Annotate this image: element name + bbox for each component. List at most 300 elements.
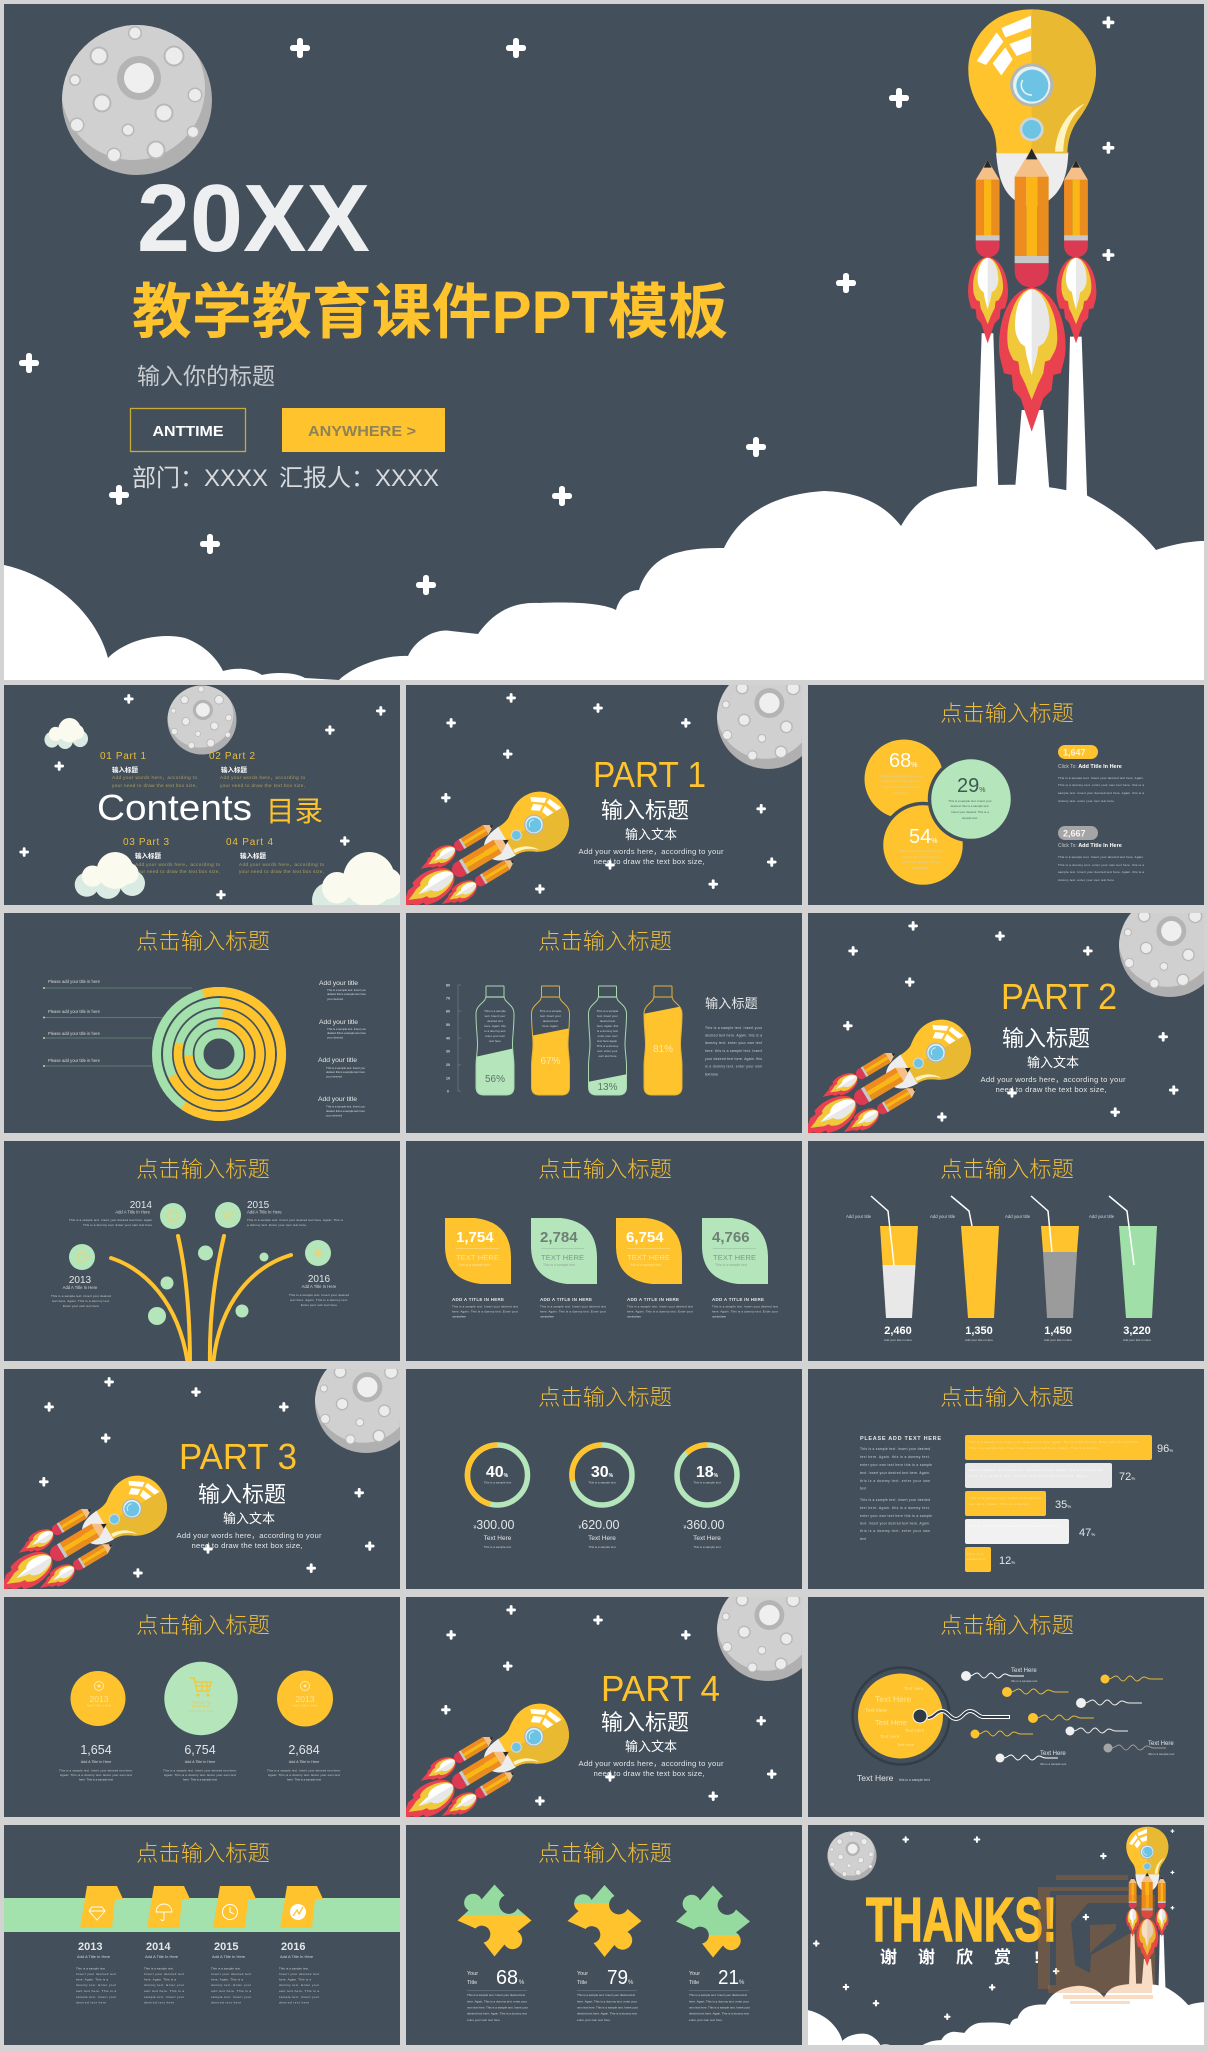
circle: 29%: 29%: [957, 775, 985, 797]
chart axis: 20: [446, 1063, 450, 1067]
bottle: 67%: here. Again.: [542, 1024, 559, 1028]
panel: band timeline slide: [4, 1825, 400, 2045]
right text column: Add your title: [319, 980, 358, 987]
rocket: [783, 1009, 982, 1161]
milestone: 2013: This is a sample text. Insert your desired: [51, 1294, 111, 1298]
circle: 54%: Insert your desired. This is a: [902, 860, 940, 864]
stat block: 1,647: [1058, 745, 1144, 803]
stars: [441, 1605, 777, 1806]
icon: moon: [61, 16, 212, 175]
title: 点击输入标题: [136, 1613, 270, 1638]
left text block: text here. Again. this is a dummy text.: [860, 1455, 930, 1459]
item: part 4: [226, 837, 324, 874]
milestone: 2015: 2015: [247, 1200, 270, 1211]
puzzle: 68%: [458, 1884, 532, 2022]
column: 2014: Insert your desired text: [144, 1972, 184, 1976]
column: 2014: 2014: [146, 1941, 171, 1953]
main yellow disc: [852, 1668, 950, 1764]
card: 4,766: [702, 1218, 768, 1284]
donut: 18%: 18%: [696, 1464, 719, 1481]
bottle: 13%: 13%: [597, 1082, 618, 1093]
bar: 72%: [965, 1463, 1135, 1488]
section subtitle: 输入文本: [625, 827, 677, 842]
part heading: PART 3: [179, 1436, 297, 1477]
description: Add your words here，according to your: [578, 847, 724, 856]
circle: 54%: This is a sample text. Insert your: [899, 849, 943, 853]
subtitle: 输入你的标题: [137, 363, 275, 389]
bottle: 56%: text here: [489, 1039, 501, 1043]
right text column: [318, 980, 366, 1118]
stat block: 1,647: 1,647: [1063, 748, 1086, 758]
circle: 68%: Insert your desired. This is a: [882, 785, 920, 789]
left callouts: Please add your title in here: [48, 1009, 101, 1014]
donut: 18%: ¥360.00: [683, 1518, 725, 1532]
stat circle: 1,654: 2013: [90, 1694, 109, 1704]
bottle: 67%: 67%: [540, 1056, 561, 1067]
caption 3: [627, 1297, 693, 1318]
column: 2016: sample text. Insert your: [279, 1995, 319, 1999]
column: 2016: desired text here: [279, 2000, 309, 2004]
item: part 1: Add your words here，according to: [112, 775, 197, 781]
chart axis: 70: [446, 996, 450, 1000]
caption 2: own text here: [540, 1314, 554, 1318]
puzzle: 79%: desired text here. Again. This is a dummy text: [577, 2012, 637, 2016]
milestone: 2014: Add A Title In Here: [115, 1210, 151, 1214]
column: 2013: here. Again. This is a: [76, 1978, 108, 1982]
circle: 68%: desired. this is a sample text.: [882, 779, 921, 783]
caption 2: This is a sample text. Insert your desired text: [540, 1304, 606, 1308]
puzzle: 79%: here. Again. This is a dummy text. enter your: [577, 2000, 637, 2004]
column: 2016: here. Again. This is a: [279, 1978, 311, 1982]
stat circle: 2,684: This is a sample text. Insert your desired text here.: [267, 1768, 341, 1772]
card: 2,784: This is a sample text: [543, 1263, 575, 1267]
section title: 输入标题: [601, 1710, 689, 1735]
puzzle: 79%: Your: [577, 1971, 588, 1977]
puzzle: 79%: Title: [577, 1980, 587, 1986]
stat circle: 6,754: 6,754: [184, 1743, 216, 1757]
left text block: This is a sample text. Insert your desired: [860, 1447, 930, 1451]
circle: 29%: This is a sample text. Insert your: [948, 799, 992, 803]
stat block: 2,667: dummy text. enter your own text here: [1058, 878, 1114, 882]
stat block: 1,647: Click To: Add Title In Here: [1058, 764, 1122, 770]
main yellow disc: Text Here: [880, 1734, 900, 1739]
circle: 54%: 54%: [909, 826, 937, 848]
stat circle: 2,684: Again. This is a dummy text. Enter your own text: [268, 1773, 340, 1777]
puzzle: 21%: %: [739, 1980, 745, 1986]
panel: donut rings slide: [406, 1369, 802, 1589]
right text column: desired. this is a sample text. here: [326, 1070, 365, 1074]
left text block: enter your own text here this is a sample: [860, 1463, 932, 1467]
circle: 68%: [864, 740, 944, 818]
wave: yellow b: [1100, 1674, 1163, 1684]
wave: gray with label: [1104, 1741, 1175, 1756]
panel: bottle chart slide: [406, 913, 802, 1133]
left callouts: Please add your title in here: [48, 1031, 101, 1036]
stat block: 1,647: This is a dummy text. enter your own text here. this is a: [1058, 783, 1144, 787]
bottle: 13%: desired text: [600, 1019, 615, 1023]
puzzle: 79%: enter your own text here: [577, 2018, 610, 2022]
wave: gray with label: Text Here: [1148, 1741, 1174, 1747]
bottle: 67%: This is a sample: [540, 1009, 562, 1013]
item: part 1: 01 Part 1: [100, 751, 146, 762]
button: anttime: [130, 408, 246, 452]
chart axis: [446, 984, 461, 1094]
card: 4,766: This is a sample text: [715, 1263, 747, 1267]
wave: yellow d: [970, 1730, 1033, 1738]
column: 2015: Insert your desired text: [211, 1972, 251, 1976]
caption 3: own text here: [627, 1314, 641, 1318]
right text column: desired. this is a sample text. here: [327, 992, 366, 996]
side text: text here: [705, 1072, 718, 1076]
stars: [19, 16, 1114, 595]
title: 点击输入标题: [136, 1841, 270, 1866]
right text column: your desired: [326, 1114, 342, 1118]
panel: horizontal bars slide: [808, 1369, 1204, 1589]
icon: moon: [716, 661, 819, 769]
column: 2015: Add A Title In Here: [212, 1954, 246, 1959]
circle: 29%: Insert your desired. This is a: [951, 810, 989, 814]
bottle: 56%: text. Insert your: [485, 1014, 505, 1018]
panel: part 2 slide: [808, 913, 1204, 1133]
title: 点击输入标题: [538, 1385, 672, 1410]
main yellow disc: Text Here: [897, 1742, 915, 1747]
milestone: 2016: Enter your own text here: [301, 1303, 337, 1307]
wave: gray with label: this is a sample text: [1148, 1752, 1175, 1756]
caption 2: ADD A TITLE IN HERE: [540, 1297, 592, 1302]
puzzle: 21%: Title: [689, 1980, 699, 1986]
card: 4,766: TEXT HERE: [713, 1253, 756, 1262]
column: 2014: here. Again. This is a: [144, 1978, 176, 1982]
button: anywhere: ANYWHERE >: [308, 424, 416, 440]
wave: white with label: this is a sample text: [1011, 1679, 1038, 1683]
wave: white with label b: this is a sample text: [1040, 1762, 1067, 1766]
main yellow disc: Text Here: [905, 1728, 925, 1733]
stat circle: 6,754: This is a sample text. Insert your desired text here.: [163, 1768, 237, 1772]
wave: yellow a: [1002, 1687, 1068, 1697]
stat circle: 2,684: Add A Title In Here: [289, 1760, 319, 1764]
donut: 18%: Text Here: [693, 1535, 721, 1542]
main wave connector: [913, 1709, 1010, 1723]
panel: thanks slide: [808, 1825, 1204, 2045]
stat circle: 1,654: 1,654: [80, 1743, 112, 1757]
title: 点击输入标题: [940, 1613, 1074, 1638]
circle: 29%: desired. this is a sample text.: [951, 804, 990, 808]
glass: 2,460: [846, 1196, 918, 1342]
stat block: 2,667: [1058, 826, 1144, 882]
rocket: [381, 1693, 580, 1845]
right text column: your desired: [326, 1074, 342, 1078]
left text block: text here. Again. this is a dummy text.: [860, 1506, 930, 1510]
glass: 2,460: Add your title: [846, 1214, 872, 1219]
title: 点击输入标题: [538, 1157, 672, 1182]
milestone: 2016: 2016: [308, 1274, 331, 1285]
icon: small cloud: [44, 718, 88, 749]
description: [980, 1075, 1126, 1094]
bar: 47%: 47%: [1079, 1527, 1095, 1539]
stat block: 1,647: This is a sample text. Insert your desired text here. Again.: [1058, 776, 1144, 780]
bar: 96%: This is a sample text. Insert your desired text here. Again. This is a dummy.: [969, 1446, 1099, 1450]
donut: 18%: This is a sample text: [693, 1480, 721, 1484]
thanks subtitle: 谢谢欣赏!: [880, 1947, 1040, 1967]
milestone: 2013: text here. Again. This is a dummy text.: [52, 1299, 110, 1303]
circle: 68%: sample text.: [893, 791, 909, 795]
puzzle: 68%: here. Again. This is a dummy text. enter your: [467, 2000, 527, 2004]
panel: three circles slide: [4, 1597, 400, 1817]
donut: 30%: This is a sample text: [588, 1545, 616, 1549]
column: 2015: This is a sample text.: [211, 1966, 241, 1970]
glass: 1,450: [1005, 1196, 1079, 1342]
bar: 47%: [965, 1519, 1095, 1544]
card: 6,754: TEXT HERE: [627, 1253, 670, 1262]
column: 2014: dummy text. Enter your: [144, 1983, 184, 1987]
caption 4: This is a sample text. Insert your desired text: [712, 1304, 778, 1308]
decorative mint dots: [148, 1246, 268, 1325]
icon: moon: [1118, 889, 1208, 997]
column: 2014: desired text here: [144, 2000, 174, 2004]
stat circle: 2,684: 2,684: [288, 1743, 320, 1757]
chart axis: 0: [447, 1090, 449, 1094]
bottle: 56%: [475, 986, 515, 1096]
disc caption: this is a sample text: [899, 1778, 930, 1782]
donut: 30%: [567, 1440, 637, 1549]
left callouts: Please add your title in here: [48, 979, 101, 984]
card: 6,754: [616, 1218, 682, 1284]
panel: glasses chart slide: [808, 1141, 1204, 1361]
description: Add your words here，according to your: [980, 1075, 1126, 1084]
milestone: 2015: This is a sample text. Insert your desired text here. Again. This is: [247, 1218, 344, 1222]
column: 2013: Add A Title In Here: [77, 1954, 111, 1959]
title: 点击输入标题: [940, 701, 1074, 726]
stat block: 2,667: This is a sample text. Insert your desired text here. Again.: [1058, 855, 1144, 859]
bar: 12%: sample text: [967, 1557, 985, 1561]
stars: [813, 1829, 1174, 2020]
bottle: 13%: own text here: [598, 1054, 617, 1058]
rocket with exhaust trails: [968, 9, 1096, 503]
bottle: 56%: This is a sample: [484, 1009, 506, 1013]
milestone: 2014: This is a dummy text. Enter your own text here.: [83, 1223, 153, 1227]
item: part 1: 输入标题: [112, 765, 138, 774]
description: need to draw the text box size,: [996, 1085, 1106, 1094]
right text column: This is a sample text. Insert you: [327, 988, 366, 992]
bar: 47%: This is a sample text. Insert your desired text here.: [969, 1524, 1061, 1528]
column: 2014: sample text. Insert your: [144, 1995, 184, 1999]
stat circle: 1,654: here. This is a sample text: [79, 1778, 113, 1782]
stat block: 2,667: sample text. Insert your desired text here. Again. this is a: [1058, 870, 1144, 874]
donut: 30%: Text Here: [588, 1535, 616, 1542]
bottle: 13%: text. Insert your: [597, 1014, 618, 1018]
milestone: 2016: Add A Title In Here: [302, 1284, 337, 1289]
wave: white with label: [961, 1668, 1038, 1683]
puzzle: 21%: This is a sample text. Insert your desired text: [689, 1993, 747, 1997]
column: 2014: [144, 1941, 184, 2004]
stat block: 1,647: dummy text. enter your own text here: [1058, 799, 1114, 803]
stars: [39, 1377, 375, 1578]
left text block: text: [860, 1486, 866, 1490]
puzzle: 68%: 68: [496, 1967, 518, 1989]
item: part 2: 02 Part 2: [209, 751, 255, 762]
contents heading: Contents: [97, 787, 252, 828]
chart axis: 40: [446, 1036, 450, 1040]
cloud: [4, 485, 1204, 680]
rocket: [381, 781, 580, 933]
column: 2013: desired text here: [76, 2000, 106, 2004]
part heading: PART 1: [593, 754, 706, 795]
icon: large cloud: [312, 852, 411, 921]
title: 点击输入标题: [136, 929, 270, 954]
circle: 29%: [930, 758, 1012, 840]
bottle: 67%: text. Insert your: [540, 1014, 561, 1018]
bar: 96%: This is a sample text. Insert your desired text here. Again. This is a dummy text. Enter your own text here.: [969, 1440, 1139, 1444]
caption 3: here. Again. This is a dummy text. Enter your: [627, 1310, 693, 1314]
puzzle: 79%: 79: [607, 1967, 628, 1989]
right text column: This is a sample text. Insert you: [327, 1027, 366, 1031]
wave: white with label b: [996, 1751, 1067, 1766]
bottle: 13%: This is a dummy: [597, 1044, 619, 1048]
right text column: This is a sample text. Insert you: [326, 1104, 365, 1108]
bottle: 13%: This is a sample: [597, 1009, 619, 1013]
chart axis: 30: [446, 1050, 450, 1054]
tab: 2016 chart: [280, 1886, 323, 1928]
caption 4: here. Again. This is a dummy text. Enter your: [712, 1310, 778, 1314]
stat circle: 6,754: [163, 1662, 238, 1782]
bottle: 56%: 56%: [485, 1074, 505, 1085]
puzzle: 79%: [568, 1885, 642, 2022]
item: part 3: Add your words here，according to: [135, 862, 220, 868]
column: 2013: own text here. This is a: [76, 1989, 116, 1993]
disc caption: [857, 1773, 930, 1783]
caption 2: here. Again. This is a dummy text. Enter your: [540, 1310, 606, 1314]
milestone: 2014: [69, 1200, 186, 1229]
right text column: Add your title: [318, 1057, 357, 1064]
stat circle: 2,684: [267, 1670, 341, 1782]
left text block: PLEASE ADD TEXT HERE: [860, 1436, 941, 1442]
firework stems: [111, 1236, 291, 1365]
item: part 2: 输入标题: [221, 765, 248, 774]
stat circle: 1,654: Again. This is a dummy text. Enter your own text: [60, 1773, 132, 1777]
column: 2015: own text here. This is a: [211, 1989, 251, 1993]
milestone: 2016: [289, 1240, 349, 1307]
description: Add your words here，according to your: [176, 1531, 322, 1540]
donut: 40%: This is a sample text: [484, 1480, 511, 1484]
item: part 4: 输入标题: [240, 851, 266, 860]
card: 2,784: [531, 1218, 597, 1284]
watermark: [1038, 1875, 1155, 2004]
side text: your desired text here. Again. this: [705, 1057, 762, 1061]
column: 2015: desired text here: [211, 2000, 241, 2004]
donut: 18%: [665, 1433, 749, 1549]
puzzle: 21%: here. Again. This is a dummy text. enter your: [689, 2000, 749, 2004]
column: 2014: This is a sample text.: [144, 1966, 174, 1970]
section title: 输入标题: [198, 1482, 286, 1507]
right text column: your desired: [327, 997, 343, 1001]
bar: 72%: 72%: [1119, 1471, 1135, 1483]
wave: white b: [1066, 1726, 1128, 1736]
title: 点击输入标题: [538, 1841, 672, 1866]
stars: [843, 921, 1179, 1122]
side text: desired text here. Again. this is a: [705, 1034, 762, 1038]
section subtitle: 输入文本: [223, 1511, 275, 1526]
wave: white a: [1076, 1698, 1142, 1708]
puzzle: 21%: Your: [689, 1971, 700, 1977]
panel: contents slide: [4, 685, 400, 905]
right text column: your desired: [327, 1036, 343, 1040]
part heading: PART 2: [1001, 976, 1117, 1017]
description: need to draw the text box size,: [594, 1769, 704, 1778]
left callouts: Please add your title in here: [48, 1058, 101, 1063]
milestone: 2013: [51, 1244, 111, 1308]
part heading: PART 4: [601, 1668, 720, 1709]
item: part 3: your need to draw the text box size,: [135, 869, 220, 874]
donut: 30%: This is a sample text: [588, 1480, 616, 1484]
main yellow disc: Text Here: [875, 1718, 907, 1727]
caption 2: [540, 1297, 606, 1318]
card: 1,754: [445, 1218, 511, 1284]
year heading: 20XX: [137, 165, 370, 272]
contents heading: 目录: [266, 796, 323, 828]
column: 2014: Add A Title In Here: [145, 1954, 179, 1959]
caption 3: This is a sample text. Insert your desired text: [627, 1304, 693, 1308]
left text block: this is a dummy text. enter your own: [860, 1529, 930, 1533]
puzzle: 21%: [676, 1886, 750, 2022]
puzzle: 68%: %: [519, 1980, 525, 1986]
donut: 40%: This is a sample text: [484, 1545, 511, 1549]
card: 1,754: TEXT HERE: [456, 1253, 499, 1262]
circle: 54%: [882, 804, 964, 886]
donut: 40%: [461, 1439, 534, 1549]
bottle: 81%: [643, 986, 683, 1096]
card: 1,754: 1,754: [456, 1229, 494, 1246]
milestone: 2016: This is a sample text. Insert your desired: [289, 1293, 349, 1297]
caption 1: ADD A TITLE IN HERE: [452, 1297, 504, 1302]
glass: 3,220: Add your title in Here: [1123, 1338, 1151, 1342]
column: 2015: [211, 1941, 251, 2004]
circle: 54%: sample text.: [913, 866, 929, 870]
stat block: 2,667: This is a dummy text. enter your own text here. this is a: [1058, 863, 1144, 867]
item: part 3: 03 Part 3: [123, 837, 169, 848]
puzzle: 68%: enter your own text here: [467, 2018, 500, 2022]
puzzle: 21%: own text here. This is a sample text. Insert your: [689, 2006, 750, 2010]
stat circle: 2,684: 2013: [296, 1694, 315, 1704]
puzzle: 79%: %: [628, 1980, 634, 1986]
bottle: 13%: text here Again.: [597, 1039, 618, 1043]
right text column: desired. this is a sample text. here: [327, 1031, 366, 1035]
side text: is a dummy text. enter your own: [705, 1064, 762, 1068]
stat circle: 6,754: 2013: [192, 1699, 211, 1709]
milestone: 2013: Enter your own text here: [63, 1304, 99, 1308]
stat circle: 6,754: Add A Title In Here: [185, 1760, 215, 1764]
left text block: [860, 1436, 941, 1541]
caption 4: own text here: [712, 1314, 726, 1318]
icon: moon: [167, 681, 236, 754]
milestone: 2015: Add A Title In Here: [247, 1210, 282, 1214]
presenter line: 汇报人：XXXX: [279, 465, 439, 492]
item: part 4: 04 Part 4: [226, 837, 273, 848]
bottle: 56%: is a dummy text: [484, 1029, 506, 1033]
glass: 2,460: 2,460: [884, 1325, 912, 1337]
bottle: 56%: here. Again. this: [484, 1024, 506, 1028]
icon: moon: [314, 1345, 417, 1453]
puzzle: 68%: This is a sample text. Insert your desired text: [467, 1993, 525, 1997]
bottle: 13%: [588, 986, 628, 1096]
column: 2016: Insert your desired text: [279, 1972, 319, 1976]
card: 4,766: 4,766: [712, 1229, 750, 1246]
column: 2013: dummy text. Enter your: [76, 1983, 116, 1987]
section title: 输入标题: [601, 798, 689, 823]
chart axis: 80: [446, 984, 450, 988]
bar: 35%: 35%: [1055, 1499, 1071, 1511]
item: part 2: Add your words here，according to: [220, 775, 305, 781]
puzzle: 21%: desired text here. Again. This is a dummy text: [689, 2012, 749, 2016]
